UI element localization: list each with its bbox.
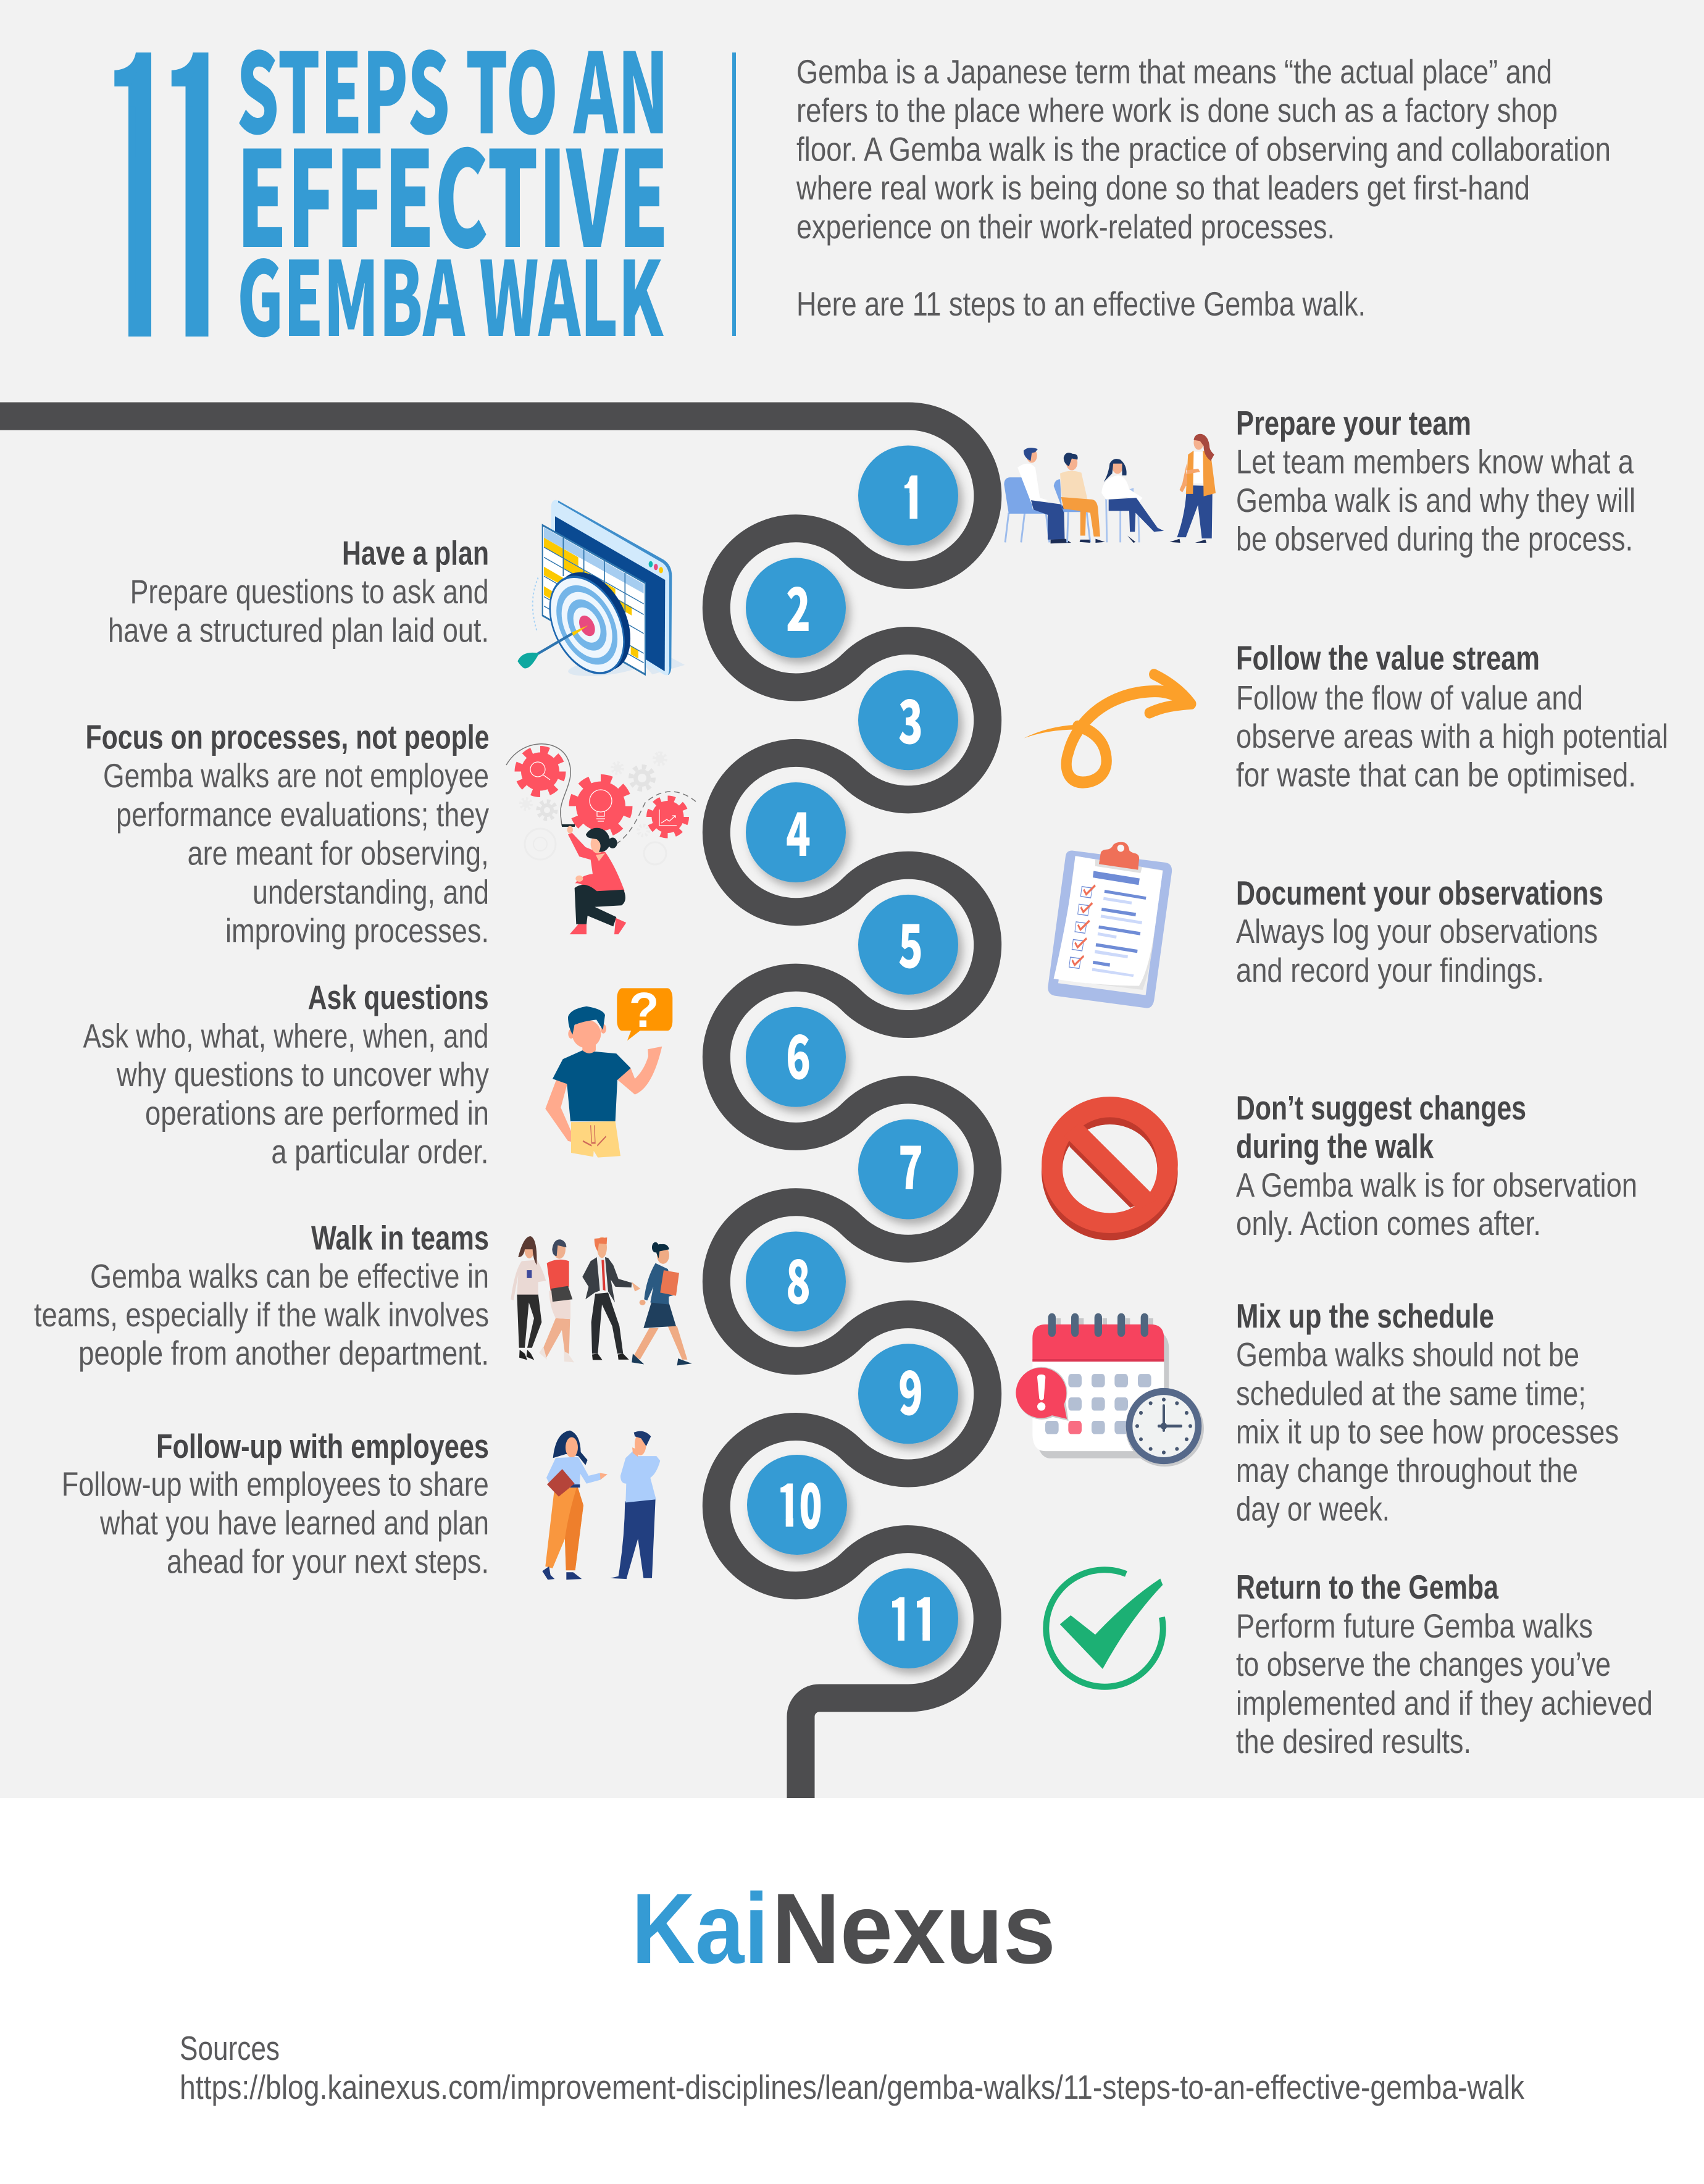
step 5: 5 [898, 898, 923, 985]
intro text: Here are 11 steps to an effective Gemba walk. [796, 285, 1366, 323]
text: Mix up the schedule [1236, 1297, 1619, 1528]
icon: man asking a question [545, 982, 672, 1158]
step 6: 6 [786, 1009, 811, 1096]
step 3: 3 [898, 674, 923, 761]
gear: magnifier [518, 750, 562, 794]
question mark: ? [629, 982, 659, 1037]
text: Mix up the schedule: Gemba walks should not be [1236, 1336, 1579, 1374]
text: Ask questions: a particular order. [271, 1132, 488, 1171]
text: Don't suggest changes: during the walk [1236, 1127, 1434, 1165]
step 7 [858, 1119, 958, 1220]
step 1 [858, 446, 958, 546]
title: EFFECTIVE [236, 94, 669, 285]
text: Prepare your team: Prepare your team [1236, 404, 1471, 442]
text: Document your observations: and record your findings. [1236, 951, 1544, 989]
text: Focus on processes: are meant for observing, [188, 834, 489, 872]
gear: chart [649, 798, 687, 835]
white footer panel [0, 1798, 1704, 2184]
icon: green check mark [1046, 1570, 1163, 1687]
step 8 [746, 1231, 846, 1331]
text: Don't suggest changes: only. Action comes after. [1236, 1204, 1541, 1242]
intro text: Gemba is a Japanese term that means “the actual place” and [796, 52, 1552, 91]
text: Follow the value stream: for waste that can be optimised. [1236, 756, 1636, 794]
text: Ask questions: Ask questions [308, 978, 489, 1016]
text: Follow-up with employees [62, 1427, 489, 1581]
step 9: 9 [898, 1345, 923, 1432]
step 4: 4 [786, 786, 811, 873]
text: Have a plan: Prepare questions to ask and [130, 572, 489, 611]
text: Follow-up with employees: Follow-up with employees [156, 1427, 489, 1465]
text: Mix up the schedule: Mix up the schedule [1236, 1297, 1494, 1335]
icon: calendar with clock [1016, 1313, 1204, 1466]
sources [180, 2029, 1524, 2106]
header divider [732, 52, 736, 336]
text: Have a plan: Have a plan [342, 534, 489, 572]
text: Follow-up with employees: what you have learned and plan [99, 1504, 489, 1542]
gear: light bulb [573, 778, 629, 834]
step 9 [858, 1344, 958, 1444]
text: Return to the Gemba: Return to the Gemba [1236, 1568, 1498, 1606]
text: Focus on processes: improving processes. [225, 911, 489, 950]
text: Follow the value stream [1236, 638, 1668, 794]
text: Prepare your team [1236, 404, 1635, 558]
text: Return to the Gemba [1236, 1568, 1653, 1760]
intro text [796, 52, 1611, 323]
text: Focus on processes: understanding, and [253, 872, 489, 911]
text: Focus on processes: performance evaluations; they [116, 795, 489, 834]
text: Ask questions: operations are performed in [145, 1094, 489, 1132]
text: Focus on processes: Focus on processes, not people [85, 718, 489, 756]
text: Have a plan: have a structured plan laid out. [108, 611, 489, 650]
text: Walk in teams: Gemba walks can be effective in [90, 1257, 489, 1295]
text: Follow-up with employees: ahead for your next steps. [167, 1542, 489, 1581]
logo: KaiNexus [632, 1873, 1056, 1985]
step 11 [858, 1568, 958, 1668]
step 5 [858, 895, 958, 995]
text: Have a plan [108, 534, 489, 650]
text: Focus on processes: Gemba walks are not employee [103, 756, 489, 795]
step 3 [858, 670, 958, 770]
step number circles [746, 446, 958, 1668]
figure: crouching woman [567, 826, 626, 934]
icon: orange swirl arrow [1024, 674, 1191, 782]
text: Focus on processes [85, 718, 489, 950]
icon: team meeting [1004, 434, 1216, 543]
text: Prepare your team: Let team members know what a [1236, 442, 1634, 480]
step 11: 11 [888, 1572, 938, 1659]
text: Return to the Gemba: the desired results. [1236, 1722, 1471, 1760]
text: Ask questions: Ask who, what, where, when, and [83, 1016, 489, 1055]
text: Document your observations: Document your observations [1236, 874, 1603, 912]
text: Mix up the schedule: may change throughout the [1236, 1451, 1578, 1489]
text: Don't suggest changes [1236, 1089, 1637, 1242]
step 7: 7 [898, 1119, 923, 1207]
text: Mix up the schedule: day or week. [1236, 1490, 1390, 1528]
text: Return to the Gemba: Perform future Gemba walks [1236, 1607, 1593, 1645]
step 8: 8 [786, 1234, 811, 1321]
text: Follow the value stream: Follow the flow of value and [1236, 679, 1583, 717]
logo: KaiNexus: Nexus [772, 1873, 1056, 1985]
text: Don't suggest changes: Don’t suggest changes [1236, 1089, 1526, 1127]
text: Return to the Gemba: to observe the changes you’ve [1236, 1645, 1611, 1683]
text: Walk in teams: people from another department. [78, 1334, 489, 1372]
intro text: experience on their work-related processes. [796, 207, 1335, 246]
intro text: where real work is being done so that leaders get first-hand [796, 169, 1530, 207]
title: STEPS TO AN [236, 5, 669, 165]
text: Walk in teams: Walk in teams [311, 1218, 489, 1257]
text: Walk in teams: teams, especially if the walk involves [34, 1295, 489, 1334]
text: Mix up the schedule: mix it up to see how processes [1236, 1413, 1619, 1451]
step 6 [746, 1007, 846, 1107]
intro text: refers to the place where work is done such as a factory shop [796, 91, 1558, 130]
icon: two people talking [542, 1431, 660, 1579]
step 10: 10 [777, 1458, 822, 1545]
icon: four colleagues walking [511, 1236, 692, 1365]
text: Walk in teams [34, 1218, 489, 1372]
step 2 [746, 558, 846, 658]
text: Follow the value stream: Follow the value stream [1236, 638, 1540, 677]
icon: target and spreadsheet [517, 500, 685, 695]
text: Follow-up with employees: Follow-up with employees to share [62, 1465, 489, 1504]
winding road path [0, 416, 988, 1798]
step 4 [746, 782, 846, 882]
title: GEMBA WALK [237, 217, 664, 366]
header [109, 0, 1611, 448]
icon: person drawing gears [506, 744, 696, 934]
text: Mix up the schedule: scheduled at the same time; [1236, 1374, 1586, 1413]
text: Document your observations [1236, 874, 1603, 989]
step 10 [747, 1455, 847, 1555]
text: Document your observations: Always log your observations [1236, 912, 1598, 950]
icon: clipboard checklist [1048, 842, 1172, 1008]
sources: Sources [180, 2029, 280, 2067]
step 1: 1 [901, 450, 925, 537]
step 2: 2 [786, 561, 811, 648]
text: Ask questions: why questions to uncover why [116, 1055, 489, 1094]
logo: KaiNexus: Kai [632, 1873, 769, 1985]
icon: prohibited sign [1042, 1097, 1178, 1241]
text: Ask questions [83, 978, 489, 1171]
